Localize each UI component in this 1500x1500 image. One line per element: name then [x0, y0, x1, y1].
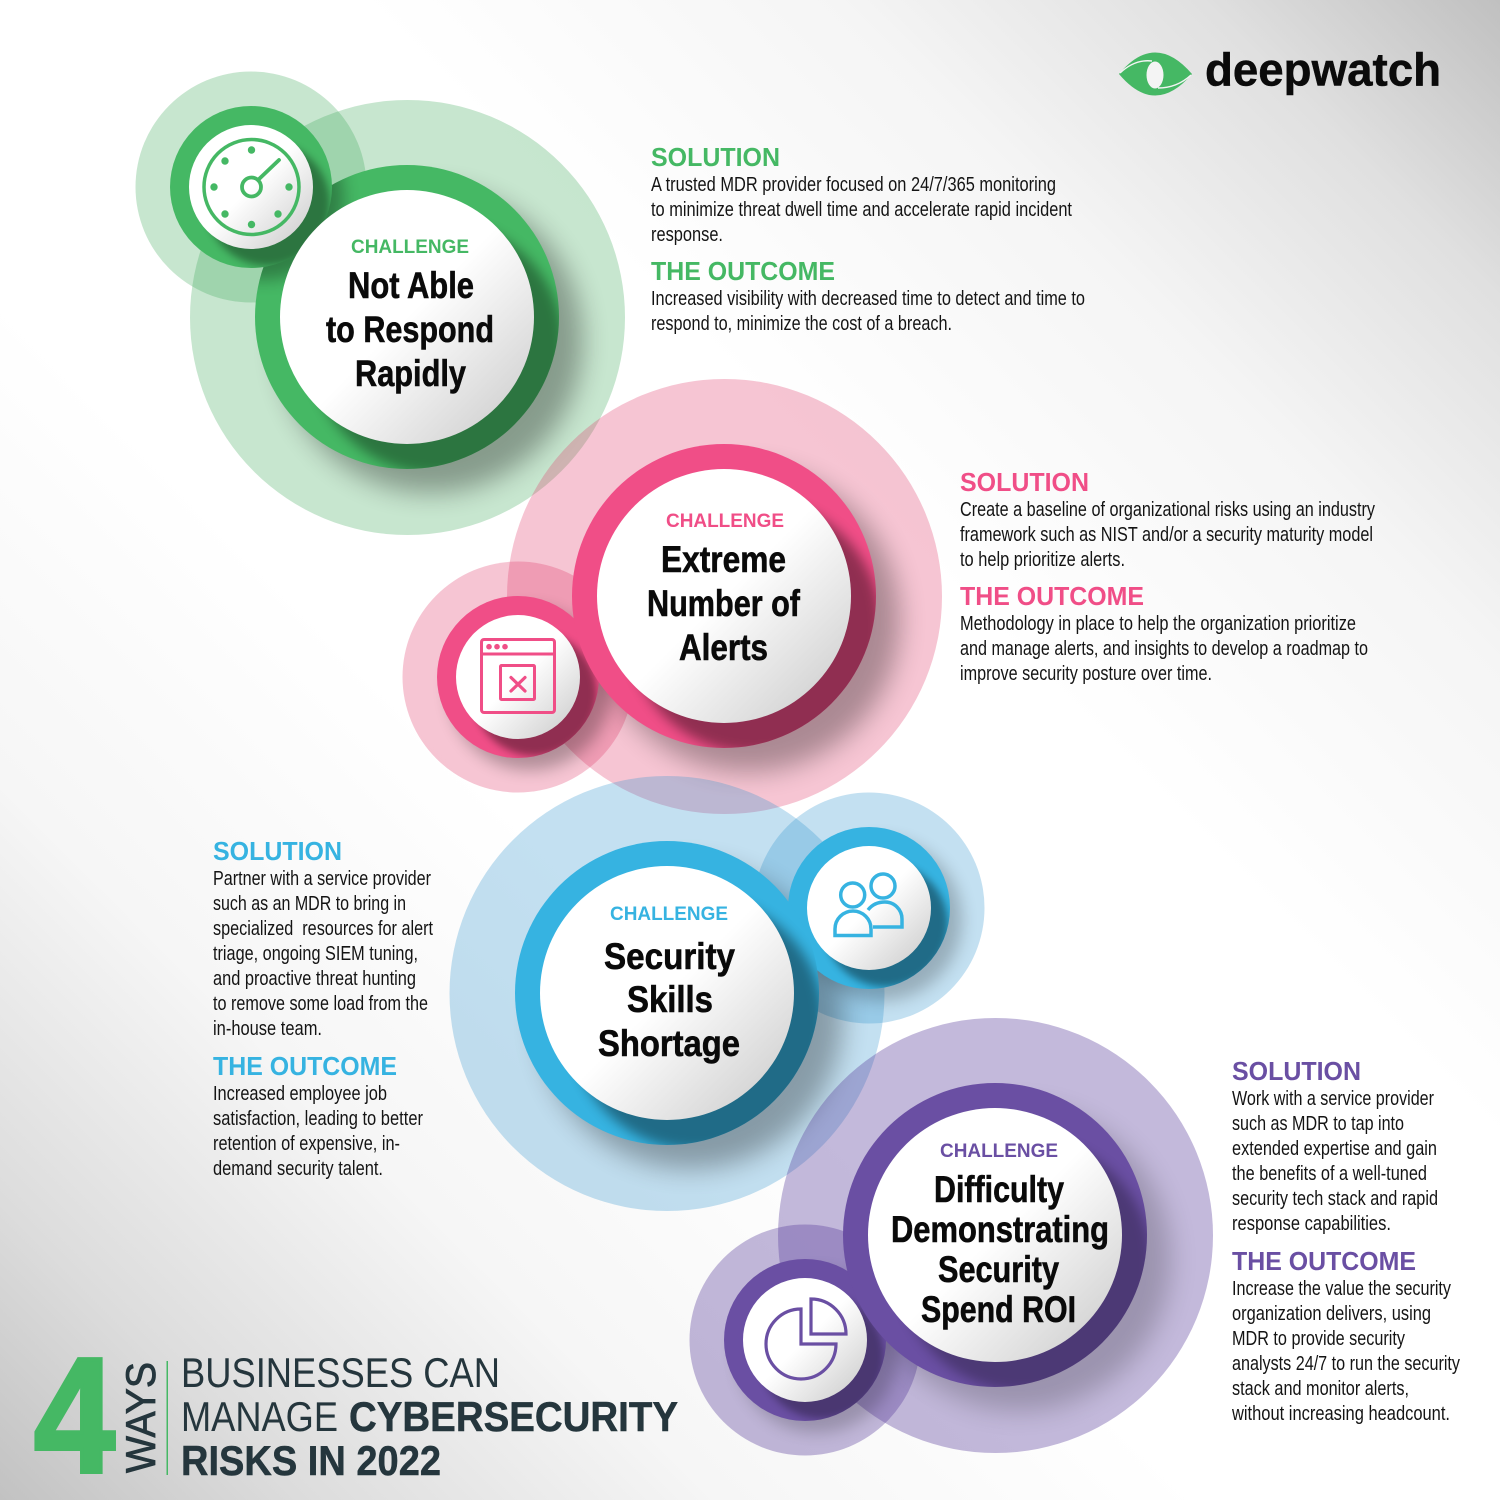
- challenge label: CHALLENGE: [940, 1141, 1058, 1162]
- challenge title: Difficulty: [934, 1169, 1064, 1210]
- title block: [34, 1324, 678, 1500]
- solution text: in-house team.: [213, 1018, 322, 1040]
- small halo: [402, 562, 634, 792]
- outcome text: demand security talent.: [213, 1158, 383, 1180]
- solution heading: SOLUTION: [960, 467, 1089, 497]
- challenge title: Alerts: [679, 627, 768, 668]
- solution text: [1232, 1088, 1438, 1235]
- outcome text: [213, 1083, 423, 1180]
- outcome heading: THE OUTCOME: [960, 581, 1144, 611]
- small badge: [170, 106, 344, 280]
- icon: stopwatch dial: [204, 140, 299, 234]
- solution text: [960, 499, 1375, 571]
- solution text: A trusted MDR provider focused on 24/7/365 monitoring: [651, 174, 1056, 196]
- big halo: [507, 379, 942, 814]
- solution heading: SOLUTION: [213, 836, 342, 866]
- outcome heading: THE OUTCOME: [213, 1051, 397, 1081]
- solution text: triage, ongoing SIEM tuning,: [213, 943, 418, 965]
- outcome text: [960, 613, 1368, 685]
- solution text: Create a baseline of organizational risks using an industry: [960, 499, 1375, 521]
- solution text: specialized resources for alert: [213, 918, 433, 940]
- challenge title: [326, 265, 494, 394]
- solution text: Work with a service provider: [1232, 1088, 1434, 1110]
- outcome text: and manage alerts, and insights to develop a roadmap to: [960, 638, 1368, 660]
- outcome text: [651, 288, 1085, 335]
- panel: challenge 3, blue: [213, 776, 984, 1211]
- icon: eye: [1119, 52, 1192, 96]
- solution text: response capabilities.: [1232, 1213, 1391, 1235]
- challenge title: Rapidly: [355, 353, 466, 394]
- big ring: [572, 444, 876, 748]
- sphere shadow on big ring: [570, 896, 824, 1150]
- outcome text: Increased visibility with decreased time to detect and time to: [651, 288, 1085, 310]
- outcome text: Methodology in place to help the organization prioritize: [960, 613, 1356, 635]
- challenge title: Skills: [627, 979, 713, 1020]
- main sphere: [868, 1108, 1122, 1362]
- solution text: to minimize threat dwell time and accelerate rapid incident: [651, 199, 1072, 221]
- solution text: and proactive threat hunting: [213, 968, 416, 990]
- solution text: security tech stack and rapid: [1232, 1188, 1438, 1210]
- solution text: [213, 868, 433, 1040]
- challenge label: CHALLENGE: [610, 904, 728, 925]
- divider: [166, 1361, 168, 1475]
- small badge: [788, 827, 962, 1001]
- outcome text: satisfaction, leading to better: [213, 1108, 423, 1130]
- vertical WAYS: WAYS: [117, 1362, 164, 1473]
- solution text: to help prioritize alerts.: [960, 549, 1125, 571]
- ring shadow on halo: [279, 189, 583, 493]
- outcome text: without increasing headcount.: [1231, 1403, 1450, 1425]
- solution text: to remove some load from the: [213, 993, 428, 1015]
- sphere shadow on big ring: [910, 1150, 1147, 1387]
- outcome text: improve security posture over time.: [960, 663, 1212, 685]
- challenge label: CHALLENGE: [666, 511, 784, 532]
- solution text: such as an MDR to bring in: [213, 893, 406, 915]
- icon: pie chart: [766, 1299, 846, 1379]
- headline: RISKS IN 2022: [181, 1437, 441, 1484]
- challenge title: [647, 539, 801, 668]
- main sphere: [597, 469, 851, 723]
- main sphere: [540, 866, 794, 1120]
- solution text: extended expertise and gain: [1232, 1138, 1437, 1160]
- challenge title: Spend ROI: [921, 1289, 1076, 1330]
- panel: challenge 1, green: [136, 72, 1085, 535]
- outcome text: Increased employee job: [213, 1083, 387, 1105]
- logo wordmark: deepwatch: [1205, 44, 1441, 96]
- panel: challenge 4, purple: [690, 1018, 1460, 1456]
- outcome text: respond to, minimize the cost of a breach.: [651, 313, 952, 335]
- logo: deepwatch: [1119, 44, 1441, 96]
- headline: [181, 1349, 678, 1484]
- headline: MANAGE: [181, 1393, 338, 1440]
- solution text: framework such as NIST and/or a security maturity model: [960, 524, 1373, 546]
- challenge title: Shortage: [598, 1023, 740, 1064]
- ring shadow on halo: [867, 1107, 1171, 1411]
- outcome heading: THE OUTCOME: [1232, 1246, 1416, 1276]
- outcome text: MDR to provide security: [1232, 1328, 1405, 1350]
- outcome text: [1231, 1278, 1460, 1425]
- ring shadow on halo: [596, 468, 900, 772]
- challenge title: Extreme: [661, 539, 786, 580]
- challenge title: [598, 936, 740, 1064]
- outcome text: organization delivers, using: [1232, 1303, 1431, 1325]
- small badge: [724, 1259, 898, 1433]
- small halo: [136, 72, 366, 302]
- panel: challenge 2, pink: [402, 379, 1375, 814]
- big halo: [450, 776, 884, 1211]
- big ring: [515, 841, 819, 1145]
- outcome text: retention of expensive, in-: [213, 1133, 400, 1155]
- headline: CYBERSECURITY: [349, 1393, 678, 1440]
- challenge title: Demonstrating: [891, 1209, 1109, 1250]
- challenge label: CHALLENGE: [351, 237, 469, 258]
- small halo: [690, 1224, 920, 1456]
- solution text: Partner with a service provider: [213, 868, 431, 890]
- solution text: response.: [651, 224, 723, 246]
- big ring: [255, 165, 559, 469]
- big halo: [778, 1018, 1213, 1453]
- big halo: [190, 100, 625, 535]
- icon: browser window error: [482, 640, 554, 712]
- ring shadow on halo: [539, 865, 843, 1169]
- headline: BUSINESSES CAN: [181, 1349, 500, 1396]
- small halo: [754, 792, 984, 1024]
- small badge: [437, 596, 611, 770]
- solution heading: SOLUTION: [1232, 1056, 1361, 1086]
- outcome heading: THE OUTCOME: [651, 256, 835, 286]
- challenge title: Number of: [647, 583, 801, 624]
- big ring: [843, 1083, 1147, 1387]
- challenge title: Security: [938, 1249, 1059, 1290]
- solution text: such as MDR to tap into: [1232, 1113, 1404, 1135]
- challenge title: to Respond: [326, 309, 494, 350]
- sphere shadow on big ring: [318, 228, 559, 469]
- challenge title: [891, 1169, 1109, 1330]
- outcome text: stack and monitor alerts,: [1232, 1378, 1409, 1400]
- challenge title: Security: [604, 936, 735, 977]
- solution text: [651, 174, 1072, 246]
- icon: two people: [835, 874, 902, 936]
- main sphere: [280, 190, 534, 444]
- outcome text: Increase the value the security: [1232, 1278, 1451, 1300]
- solution text: the benefits of a well-tuned: [1232, 1163, 1427, 1185]
- solution heading: SOLUTION: [651, 142, 780, 172]
- challenge title: Not Able: [348, 265, 474, 306]
- sphere shadow on big ring: [627, 499, 881, 753]
